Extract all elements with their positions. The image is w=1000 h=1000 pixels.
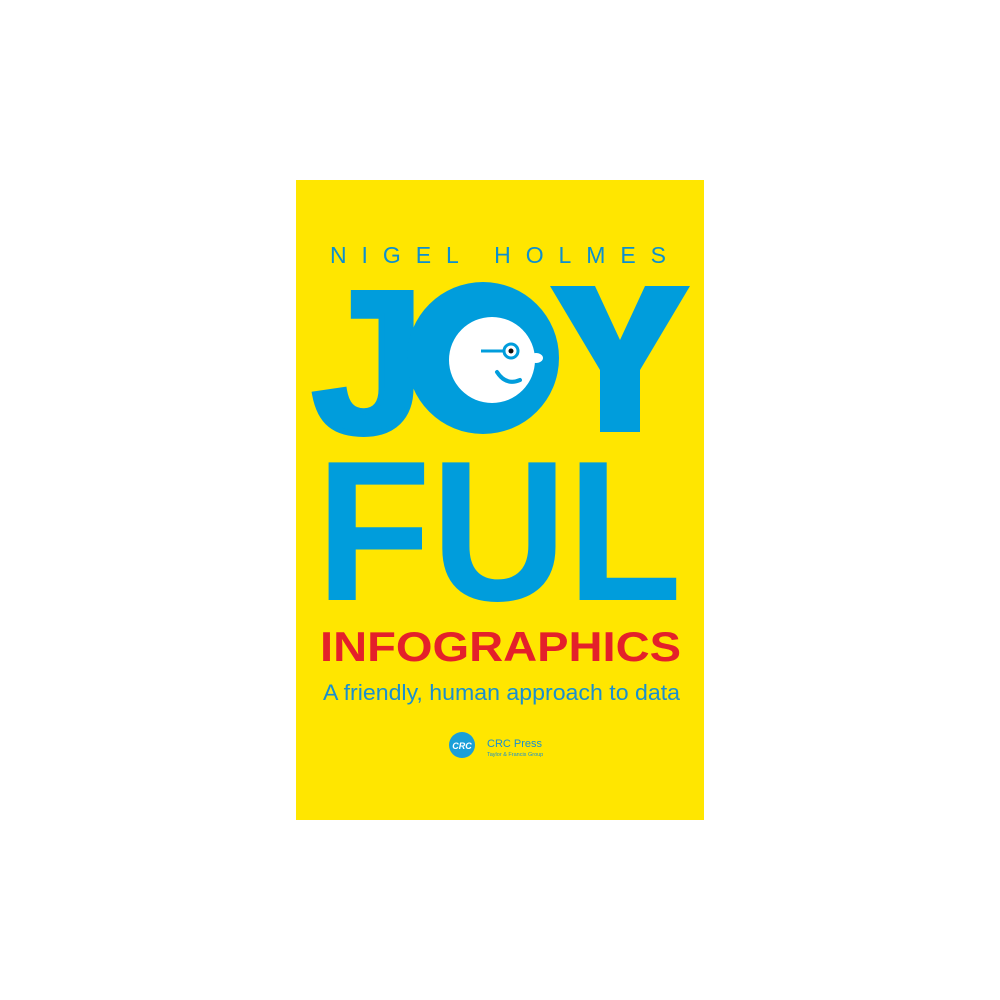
cover background	[296, 180, 704, 820]
subtitle: INFOGRAPHICS: INFOGRAPHICS	[320, 623, 681, 670]
icon: smiling face in O	[407, 282, 559, 434]
author name: NIGEL HOLMES	[330, 242, 666, 268]
title word: JOY	[312, 249, 690, 475]
publisher logo	[449, 732, 543, 758]
publisher logo: CRC Press	[487, 738, 543, 750]
tagline: A friendly, human approach to data	[323, 680, 681, 705]
publisher logo: Taylor & Francis Group	[487, 752, 543, 758]
title word: JOY: J	[312, 249, 424, 475]
publisher logo: CRC	[452, 741, 472, 751]
title word: FUL: FUL	[316, 420, 682, 643]
